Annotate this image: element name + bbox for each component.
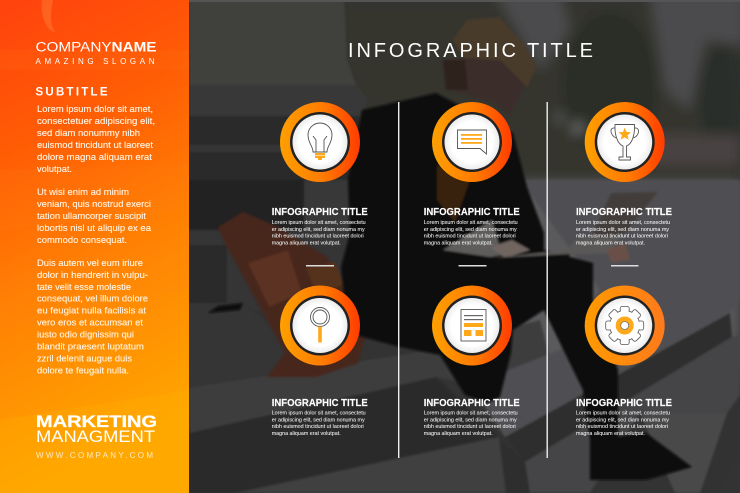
text block: paragraph 1: volutpat. <box>37 164 72 175</box>
card text: Lorem ipsum dolor sit amet, consectetu <box>272 220 366 226</box>
ring <box>585 286 665 366</box>
card text: er adipiscing elit, sed diam nonuma my <box>272 227 365 233</box>
photo: leather bag <box>208 212 365 377</box>
icon: speech bubble <box>458 130 486 154</box>
card: trophy <box>576 102 672 266</box>
website url: WWW.COMPANY.COM <box>36 451 153 460</box>
ring <box>432 102 512 182</box>
card text: magna aliquam erat volutpat. <box>272 431 341 437</box>
card: document <box>424 286 520 437</box>
text block: paragraph 2: lobortis nisl ut aliquip ex ea <box>37 223 152 234</box>
short rule <box>611 265 638 266</box>
company name: COMPANY NAME <box>36 40 157 54</box>
text block: paragraph 3: Duis autem vel eum iriure <box>37 258 143 269</box>
card text: nibh euismod tincidunt ut laoreet dolori <box>424 234 516 240</box>
card: chat <box>424 102 520 266</box>
card text: nibh euismod tincidunt ut laoreet dolori <box>576 424 668 430</box>
icon: trophy <box>611 124 639 160</box>
column divider right <box>546 102 548 458</box>
text block: paragraph 2 <box>37 187 152 246</box>
text block: paragraph 3: blandit praesent luptatum <box>37 342 144 352</box>
text block: paragraph 3: dolore te feugait nulla. <box>37 366 129 376</box>
photo: stone steps <box>189 180 740 493</box>
photo: man in black suit <box>341 17 692 480</box>
text block: paragraph 3: iusto odio dignissim qui <box>37 330 134 340</box>
card text: er adipiscing elit, sed diam nonuma my <box>272 418 365 424</box>
card title: INFOGRAPHIC TITLE <box>272 398 368 409</box>
card title: INFOGRAPHIC TITLE <box>576 207 672 218</box>
photo: blurred trees and wall <box>340 0 740 382</box>
ring <box>585 102 665 182</box>
text block: paragraph 1: Lorem ipsum dolor sit amet, <box>37 104 153 115</box>
background photo: man on steps <box>189 0 740 493</box>
card text: magna aliquam erat volutpat. <box>424 431 493 437</box>
card text: er adipiscing elit, sed diam nonuma my <box>576 227 669 233</box>
text block: paragraph 1: consectetuer adipiscing elit, <box>37 116 155 127</box>
icon: gear <box>606 306 644 344</box>
text block: paragraph 2: tation ullamcorper suscipit <box>37 211 146 222</box>
card: magnifier <box>272 286 368 437</box>
card text: nibh euismod tincidunt ut laoreet dolori <box>272 234 364 240</box>
text block: paragraph 3: zzril delenit augue duis <box>37 354 132 364</box>
card text: Lorem ipsum dolor sit amet, consectetu <box>576 410 670 416</box>
icon: document <box>461 310 486 341</box>
card text: er adipiscing elit, sed diam nonuma my <box>424 227 517 233</box>
icon: magnifying glass <box>310 308 330 342</box>
short rule <box>458 265 486 266</box>
text block: paragraph 2: commodo consequat. <box>37 235 127 246</box>
text block: paragraph 3: tate velit esse molestie <box>37 282 131 293</box>
card text <box>576 410 670 437</box>
card text: magna aliquam erat volutpat. <box>272 240 341 246</box>
text block: paragraph 1: dolore magna aliquam erat <box>37 152 152 163</box>
card text: nibh euismod tincidunt ut laoreet dolori <box>424 424 516 430</box>
text block: paragraph 3: consequat, vel illum dolore <box>37 294 148 304</box>
card text <box>424 410 518 437</box>
text block: paragraph 1 <box>37 104 155 175</box>
card text: magna aliquam erat volutpat. <box>424 240 493 246</box>
card title: INFOGRAPHIC TITLE <box>424 207 520 218</box>
subtitle: SUBTITLE <box>36 86 108 98</box>
card text: nibh euismod tincidunt ut laoreet dolori <box>272 424 364 430</box>
card text <box>272 220 366 246</box>
text block: paragraph 1: sed diam nonummy nibh <box>37 128 140 139</box>
card text <box>272 410 366 437</box>
text block: paragraph 3: vero eros et accumsan et <box>37 318 143 328</box>
card text: Lorem ipsum dolor sit amet, consectetu <box>424 220 518 226</box>
short rule <box>306 265 334 266</box>
card text: nibh euismod tincidunt ut laoreet dolori <box>576 234 668 240</box>
slogan: AMAZING SLOGAN <box>36 57 155 66</box>
managment heading: MANAGMENT <box>36 428 155 446</box>
main title: INFOGRAPHIC TITLE <box>348 40 593 62</box>
text block: paragraph 2: Ut wisi enim ad minim <box>37 187 129 198</box>
text block: paragraph 2: veniam, quis nostrud exerci <box>37 199 151 210</box>
card text: er adipiscing elit, sed diam nonuma my <box>424 418 517 424</box>
text block: paragraph 3: dolor in hendrerit in vulpu- <box>37 270 148 281</box>
photo: stone pillar <box>189 0 368 310</box>
panel: left orange sidebar <box>0 0 189 493</box>
text block: paragraph 1: euismod tincidunt ut laoreet <box>37 140 153 151</box>
ring <box>432 286 512 366</box>
card: bulb <box>272 102 368 266</box>
text block: paragraph 3 <box>37 258 148 376</box>
card text: magna aliquam erat volutpat. <box>576 240 645 246</box>
text block: paragraph 3: eu feugiat nulla facilisis at <box>37 306 146 316</box>
card text <box>576 220 670 246</box>
card title: INFOGRAPHIC TITLE <box>272 207 368 218</box>
card: gear <box>576 286 672 437</box>
card text: er adipiscing elit, sed diam nonuma my <box>576 418 669 424</box>
card text: magna aliquam erat volutpat. <box>576 431 645 437</box>
icon: light bulb <box>308 123 332 160</box>
column divider left <box>398 102 399 458</box>
card text: Lorem ipsum dolor sit amet, consectetu <box>272 410 366 416</box>
card text: Lorem ipsum dolor sit amet, consectetu <box>424 410 518 416</box>
card title: INFOGRAPHIC TITLE <box>424 398 520 409</box>
marketing heading: MARKETING <box>36 412 157 431</box>
card title: INFOGRAPHIC TITLE <box>576 398 672 409</box>
ring <box>280 286 360 366</box>
card text <box>424 220 518 246</box>
ring <box>280 102 360 182</box>
card text: Lorem ipsum dolor sit amet, consectetu <box>576 220 670 226</box>
